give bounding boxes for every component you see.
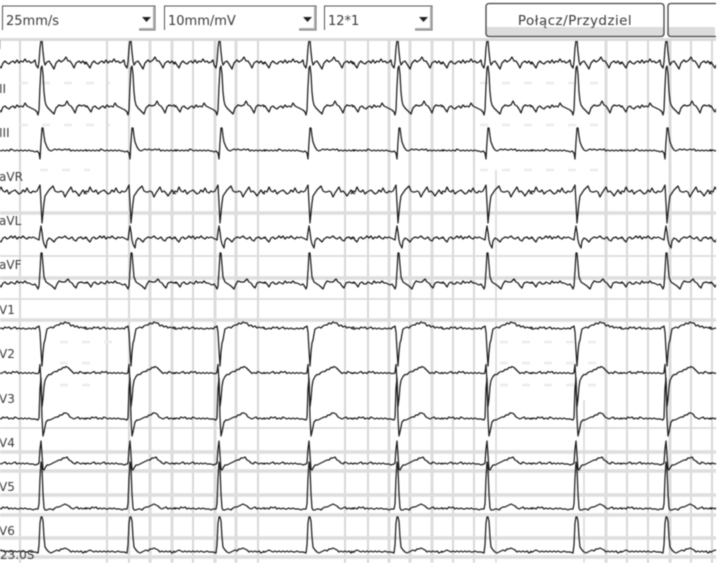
toolbar [0, 0, 720, 38]
lead V3 trace [0, 378, 720, 436]
layout dropdown: 12*1 [324, 6, 432, 30]
button: Połącz/Przydziel [486, 4, 664, 36]
lead V5 trace [0, 462, 720, 510]
gain dropdown: 10mm/mV [164, 6, 316, 30]
lead aVL trace [0, 226, 720, 248]
lead V2 trace [0, 364, 720, 406]
lead I trace [0, 40, 720, 69]
second button, cut off at the edge [668, 4, 716, 36]
gain dropdown: 10mm/mV: 10mm/mV [168, 14, 236, 29]
lead labels [0, 38, 23, 538]
lead V1 trace [0, 322, 720, 366]
button: Połącz/Przydziel: Połącz/Przydziel [518, 13, 632, 29]
lead aVR trace [0, 185, 720, 223]
lead V4 trace [0, 441, 720, 470]
lead aVF trace [0, 253, 720, 289]
lead III trace [0, 128, 720, 159]
speed dropdown: 25mm/s: 25mm/s [6, 14, 59, 29]
speed dropdown: 25mm/s [2, 6, 155, 30]
time stamp: 23.0S [0, 548, 34, 562]
layout dropdown: 12*1: 12*1 [328, 14, 359, 29]
lead V6 trace [0, 517, 720, 553]
top divider bar [0, 38, 716, 41]
lead II trace [0, 66, 720, 115]
